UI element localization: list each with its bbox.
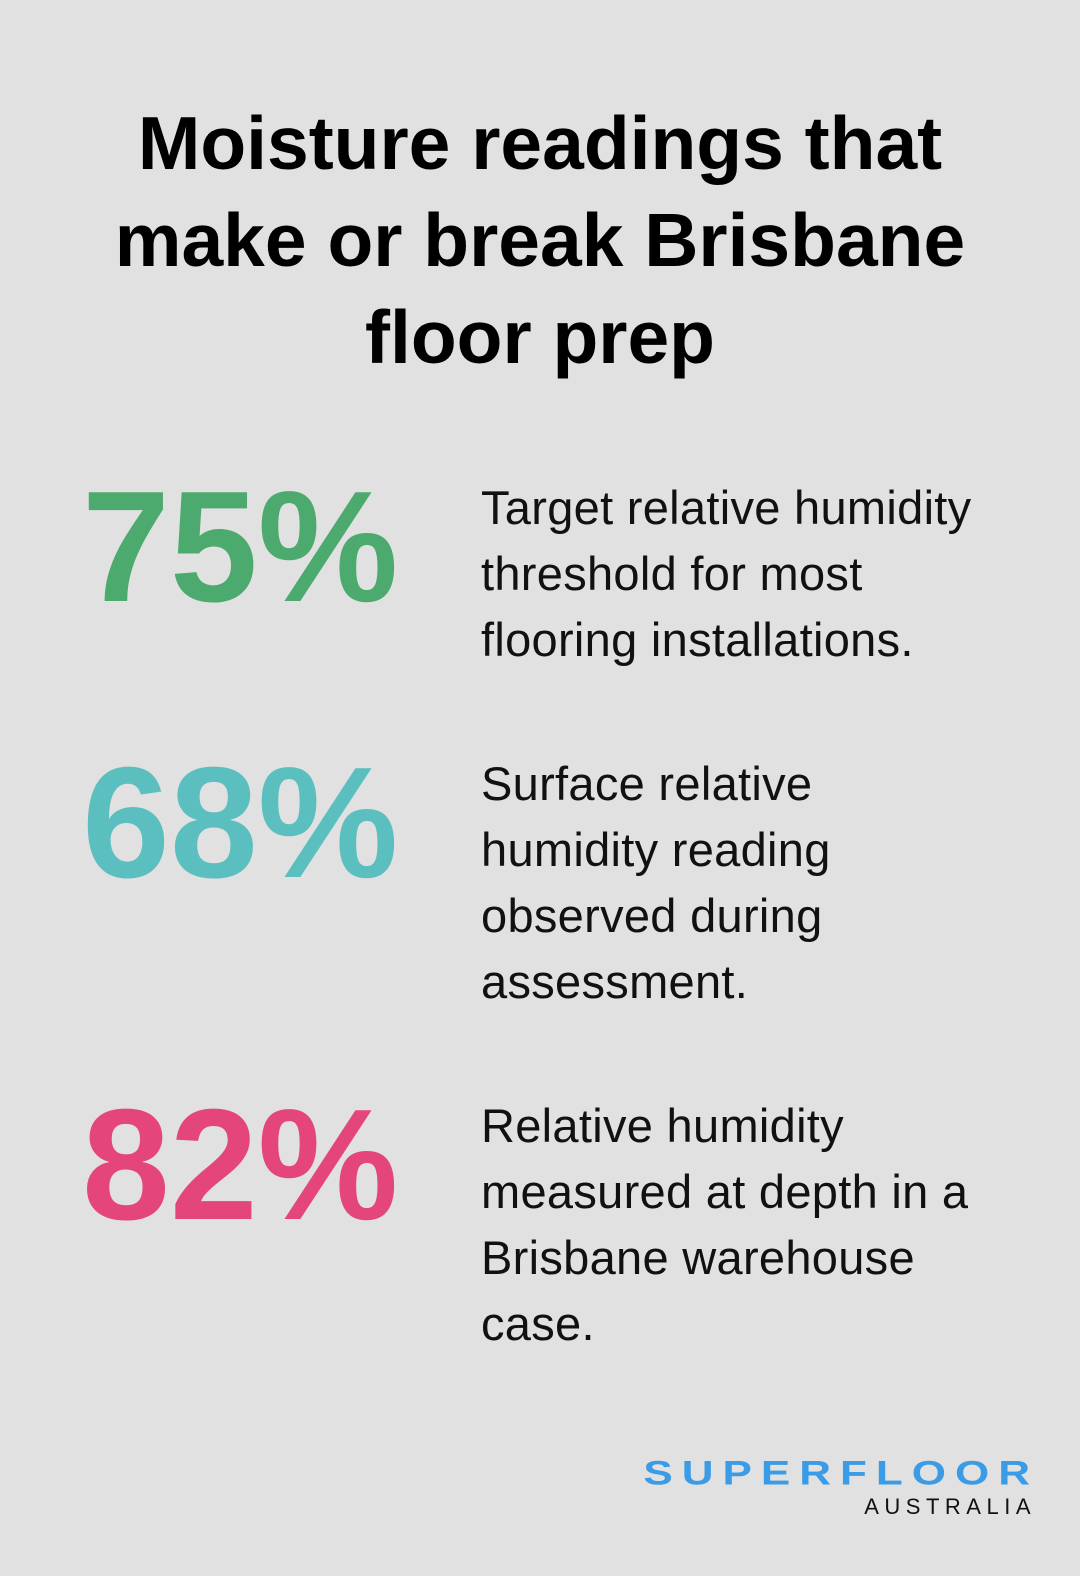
description 82%: case.	[481, 1297, 595, 1350]
description 82%: Brisbane warehouse	[481, 1231, 915, 1284]
description 75%: Target relative humidity	[481, 481, 971, 534]
number 82%: 82%	[82, 1077, 398, 1253]
title: floor prep	[365, 295, 715, 379]
stat: 68%	[82, 735, 831, 1008]
description 82%: Relative humidity	[481, 1099, 844, 1152]
number 75%: 75%	[82, 459, 398, 635]
description 68%: assessment.	[481, 955, 748, 1008]
description 68%: humidity reading	[481, 823, 831, 876]
logo: AUSTRALIA	[864, 1494, 1036, 1519]
description 75%	[481, 481, 971, 666]
description 75%: threshold for most	[481, 547, 863, 600]
description 75%: flooring installations.	[481, 613, 914, 666]
logo: SUPERFLOOR	[643, 1454, 1039, 1492]
description 68%	[481, 757, 831, 1008]
title: make or break Brisbane	[115, 198, 965, 282]
description 68%: observed during	[481, 889, 823, 942]
description 68%: Surface relative	[481, 757, 812, 810]
number 68%: 68%	[82, 735, 398, 911]
stat: 75%	[82, 459, 971, 666]
description 82%	[481, 1099, 968, 1350]
title: Moisture readings that	[138, 101, 942, 185]
logo	[643, 1454, 1039, 1519]
description 82%: measured at depth in a	[481, 1165, 968, 1218]
title	[115, 101, 965, 379]
stat: 82%	[82, 1077, 968, 1350]
